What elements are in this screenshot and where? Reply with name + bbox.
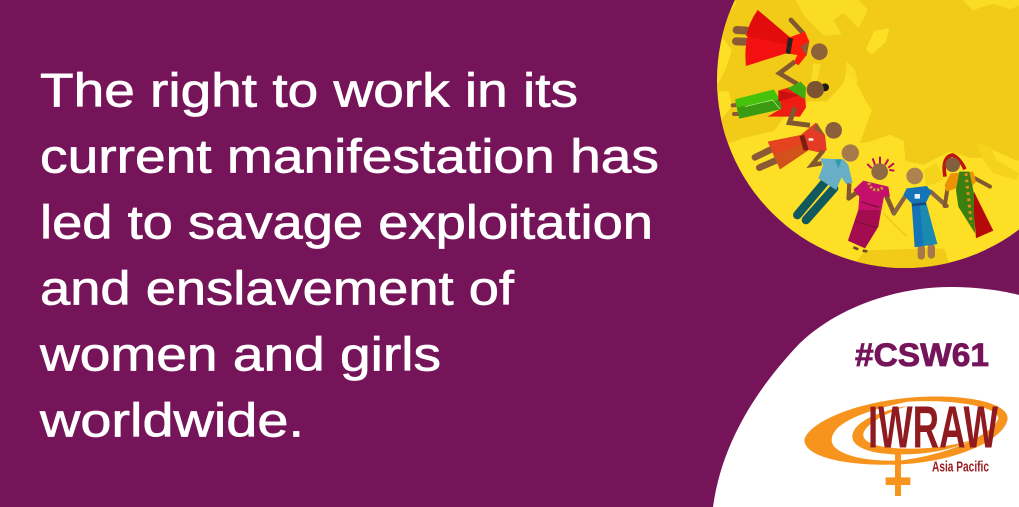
quote text: current manifestation has	[40, 130, 659, 184]
globe disc	[717, 0, 1019, 268]
IWRAW Asia Pacific logo	[804, 394, 1008, 496]
quote text: The right to work in its	[40, 64, 578, 118]
figure: green dress	[733, 81, 829, 125]
logo: Asia Pacific: Asia Pacific	[932, 458, 989, 476]
white corner panel	[713, 287, 1019, 507]
figure: blue shirt	[797, 144, 859, 220]
quote text	[39, 64, 659, 448]
figure: magenta dress with headdress	[848, 157, 894, 251]
quote text: led to savage exploitation	[40, 196, 653, 250]
figure: red dress	[736, 10, 828, 84]
figure: sari	[944, 155, 993, 238]
logo: female symbol stem	[886, 453, 910, 496]
figure: blue dress	[894, 168, 947, 256]
figure: orange dress	[755, 122, 842, 169]
quote text: women and girls	[39, 328, 441, 382]
yellow globe with figures	[710, 0, 1019, 270]
figures	[733, 10, 993, 256]
quote text: and enslavement of	[40, 262, 515, 316]
hashtag: #CSW61	[855, 337, 989, 373]
logo: orange swoosh	[804, 396, 1008, 496]
quote text: worldwide.	[39, 394, 304, 448]
map landmasses	[710, 0, 1019, 270]
